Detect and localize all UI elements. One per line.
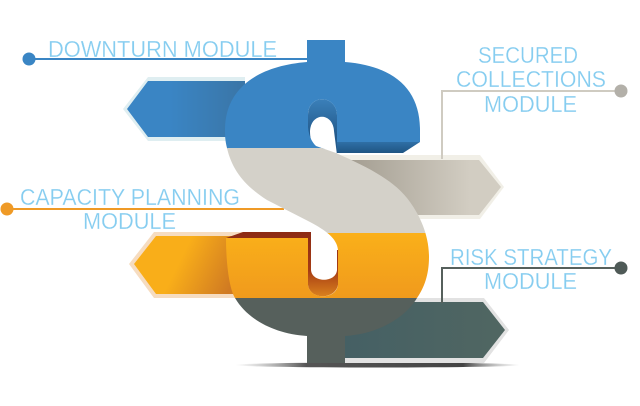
label: secured collections module: COLLECTIONS [456, 66, 606, 92]
connector: downturn [22, 52, 308, 66]
dollar sign [220, 36, 435, 368]
top counter inner wall [308, 99, 337, 155]
label: risk strategy module: MODULE [484, 268, 577, 294]
arrow: orange pointing left [129, 232, 245, 298]
colour bands [220, 36, 435, 368]
label: secured collections module [456, 42, 606, 117]
bottom extrusion [226, 232, 338, 296]
label: capacity planning module [20, 184, 240, 234]
label: risk strategy module [450, 244, 612, 294]
label: downturn module: DOWNTURN MODULE [48, 36, 277, 62]
label: capacity planning module: MODULE [83, 208, 176, 234]
label: secured collections module: SECURED [478, 42, 578, 68]
arrow: dark slate pointing right [340, 298, 509, 363]
arrow: grey pointing right [337, 155, 504, 219]
ground shadow [235, 362, 521, 368]
arrow: blue pointing left [123, 77, 245, 141]
top extrusion [337, 142, 420, 153]
top counter opening [310, 117, 337, 155]
connector: capacity planning [0, 202, 284, 216]
label: risk strategy module: RISK STRATEGY [450, 244, 612, 270]
label: capacity planning module: CAPACITY PLANNING [20, 184, 240, 210]
connector: secured collections [442, 84, 628, 159]
label: secured collections module: MODULE [484, 91, 577, 117]
connector: risk strategy [442, 262, 628, 303]
